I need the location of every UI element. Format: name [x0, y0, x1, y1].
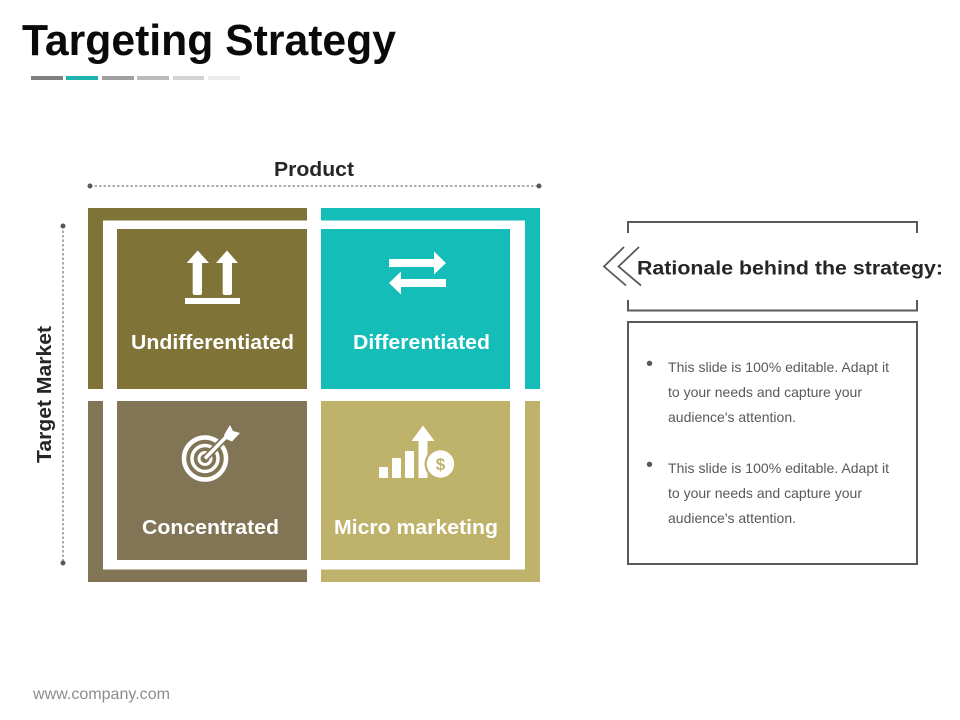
icon: target with arrow — [184, 425, 240, 480]
footer: website: www.company.com — [32, 686, 170, 703]
axis arrow: Target Market — [60, 224, 66, 566]
bullet text block 2: audience's attention. — [668, 510, 796, 526]
panel: rationale text box — [628, 322, 917, 564]
label: Concentrated: Concentrated — [142, 516, 279, 539]
bullet text block 2 — [647, 460, 889, 526]
panel: concentrated — [88, 401, 307, 582]
label: Micro marketing: Micro marketing — [334, 516, 498, 539]
bullet text block 1: This slide is 100% editable. Adapt it — [668, 359, 889, 375]
bullet text block 2: to your needs and capture your — [668, 485, 862, 501]
bracket frame: rationale heading — [628, 222, 917, 310]
icon: two up arrows on a base — [185, 250, 240, 304]
bullet text block 1: to your needs and capture your — [668, 384, 862, 400]
icon: double chevron — [604, 247, 641, 286]
label: Undifferentiated: Undifferentiated — [131, 331, 294, 354]
bullet text block 1: audience's attention. — [668, 409, 796, 425]
icon: rising bars with dollar coin — [379, 426, 456, 480]
axis label: Target Market: Target Market — [34, 326, 56, 463]
label: Differentiated: Differentiated — [353, 331, 490, 354]
icon: rising bars with dollar coin: $ — [436, 455, 446, 474]
panel: micro marketing — [321, 401, 540, 582]
icon: opposing arrows — [389, 252, 446, 294]
panel: differentiated — [321, 208, 540, 389]
title: Targeting Strategy — [22, 16, 397, 65]
axis arrow: Product — [88, 184, 542, 188]
bullet text block 1 — [647, 359, 889, 425]
panel: undifferentiated — [88, 208, 307, 389]
bullet text block 2: This slide is 100% editable. Adapt it — [668, 460, 889, 476]
heading: rationale: Rationale behind the strategy: — [637, 258, 943, 280]
title accent bars — [31, 76, 240, 80]
axis label: Product: Product — [274, 159, 354, 181]
